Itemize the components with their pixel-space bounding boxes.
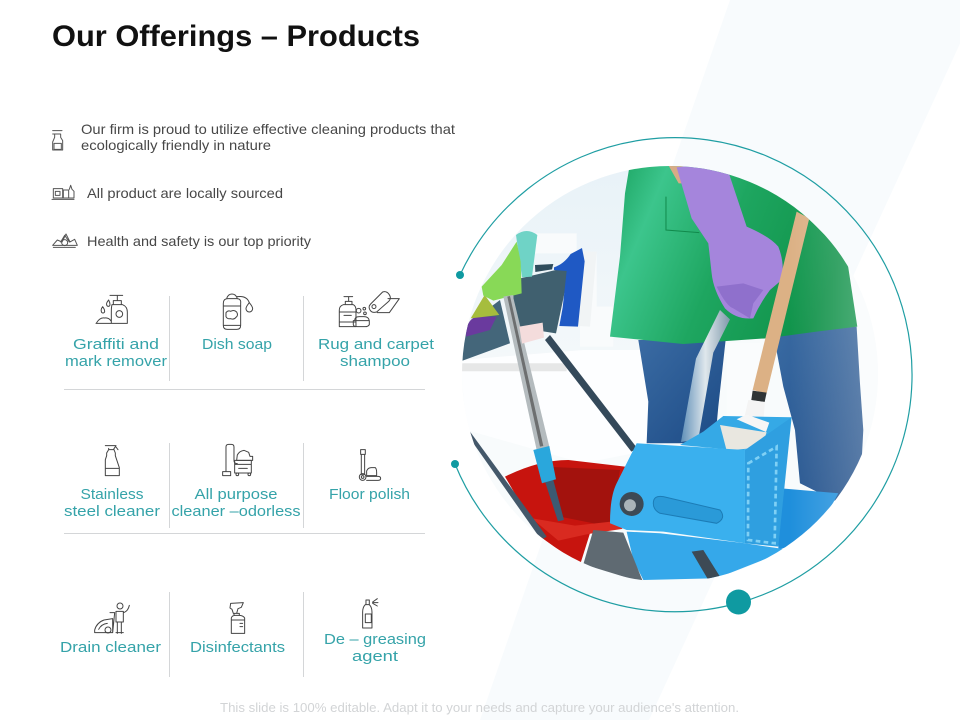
item: disinfectants: Disinfectants	[190, 639, 285, 656]
item: floor polish	[329, 450, 410, 503]
title: Our Offerings – Products	[52, 20, 420, 53]
statement: health and safety: Health and safety is our top priority	[87, 233, 311, 249]
teal ring arcs	[455, 138, 912, 612]
item: floor polish: Floor polish	[329, 486, 410, 503]
grey bucket bracket	[583, 530, 643, 583]
duster	[466, 295, 499, 337]
item: stainless steel cleaner: Stainless	[80, 486, 144, 503]
item: rug and carpet shampoo	[318, 292, 435, 370]
item: all purpose cleaner odorless: All purpose	[194, 486, 278, 503]
item: graffiti and mark remover: mark remover	[65, 353, 167, 370]
item: all purpose cleaner odorless	[172, 444, 300, 520]
statement: ecological products: Our firm is proud to utilize effective cleaning products that	[81, 121, 455, 137]
product grid	[60, 292, 435, 677]
circular photo of cleaner with mop bucket	[462, 166, 864, 580]
photo background wall and floor	[462, 170, 629, 372]
item: drain cleaner: Drain cleaner	[60, 639, 161, 656]
scrub brush	[554, 248, 585, 327]
item: all purpose cleaner odorless: cleaner –odorless	[172, 503, 300, 520]
grey caddy	[460, 264, 570, 362]
neck skin	[668, 166, 684, 184]
footer note: This slide is 100% editable. Adapt it to your needs and capture your audience's attention.	[220, 701, 739, 715]
item: graffiti and mark remover	[65, 295, 167, 370]
green glove	[482, 242, 522, 301]
mop wood handle	[743, 212, 809, 422]
red bucket	[505, 460, 625, 565]
right side fade	[800, 212, 864, 535]
dark bucket rim	[469, 432, 547, 540]
item: disinfectants	[190, 603, 285, 656]
item: stainless steel cleaner: steel cleaner	[64, 503, 160, 520]
item: de-greasing agent: De – greasing	[324, 631, 426, 648]
background diagonal band	[480, 0, 960, 720]
metal wringer handle	[681, 310, 730, 442]
green apron	[610, 163, 857, 344]
ring marker dot lower left	[451, 460, 459, 468]
blue wringer	[610, 415, 838, 580]
item: rug and carpet shampoo: Rug and carpet	[318, 336, 435, 353]
item: dish soap	[202, 294, 272, 353]
left mop pole	[503, 295, 564, 521]
purple glove	[677, 166, 783, 319]
item: drain cleaner	[60, 603, 161, 656]
item: de-greasing agent	[324, 599, 426, 665]
item: dish soap: Dish soap	[202, 336, 272, 353]
statement: ecological products: ecologically friendly in nature	[81, 137, 271, 153]
jeans	[638, 327, 863, 503]
item: rug and carpet shampoo: shampoo	[340, 353, 410, 370]
item: graffiti and mark remover: Graffiti and	[73, 336, 159, 353]
statement: locally sourced: All product are locally sourced	[87, 185, 283, 201]
statement: ecological products	[53, 121, 455, 153]
ring marker large dot	[726, 590, 751, 614]
item: de-greasing agent: agent	[352, 648, 399, 665]
teal bottle	[516, 231, 537, 277]
ring marker dot upper left	[456, 271, 464, 279]
top statements list	[52, 121, 455, 249]
grid dividers	[64, 296, 425, 677]
dark pole	[545, 335, 637, 452]
item: stainless steel cleaner	[64, 446, 160, 520]
